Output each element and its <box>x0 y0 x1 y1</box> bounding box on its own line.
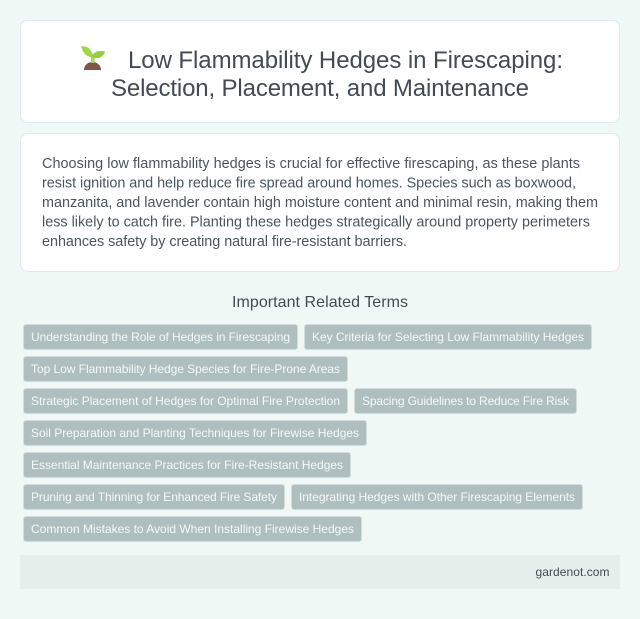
tag: Common Mistakes to Avoid When Installing Firewise Hedges <box>31 522 354 536</box>
tag: Essential Maintenance Practices for Fire-Resistant Hedges <box>31 458 343 472</box>
tag: Integrating Hedges with Other Firescaping Elements <box>299 490 575 504</box>
footer: source: gardenot.com <box>536 565 610 579</box>
text block: introduction: enhances safety by creating natural fire-resistant barriers. <box>42 234 407 250</box>
icon: seedling <box>81 46 105 70</box>
tag <box>24 356 348 382</box>
text block: introduction: Choosing low flammability hedges is crucial for effective firescaping, as these plants <box>42 156 580 172</box>
heading: title: Selection, Placement, and Maintenance <box>111 75 529 102</box>
tag <box>24 324 298 350</box>
text block: introduction: manzanita, and lavender contain high moisture content and minimal resin, making them <box>42 195 598 211</box>
tag: Top Low Flammability Hedge Species for Fire-Prone Areas <box>31 362 340 376</box>
text block: introduction <box>42 156 598 250</box>
tag <box>292 484 582 510</box>
tag <box>24 484 284 510</box>
tag <box>304 324 592 350</box>
tag <box>24 452 350 478</box>
heading: important related terms: Important Related Terms <box>232 294 408 311</box>
tag: Spacing Guidelines to Reduce Fire Risk <box>362 394 570 408</box>
heading: title: Low Flammability Hedges in Firescaping: <box>128 47 563 74</box>
footer bar <box>20 555 620 589</box>
tag <box>354 388 576 414</box>
heading: title <box>111 47 563 102</box>
text block: introduction: resist ignition and help reduce fire spread around homes. Species such as boxwood, <box>42 176 576 192</box>
tag: Understanding the Role of Hedges in Firescaping <box>31 330 290 344</box>
tag <box>24 388 348 414</box>
panel: title card <box>20 20 620 122</box>
text block: introduction: less likely to catch fire. Planting these hedges strategically around property perimeters <box>42 214 590 230</box>
tag: Key Criteria for Selecting Low Flammability Hedges <box>312 330 584 344</box>
tag: Strategic Placement of Hedges for Optimal Fire Protection <box>31 394 340 408</box>
list: related term tags <box>24 324 592 542</box>
tag <box>24 516 362 542</box>
tag: Pruning and Thinning for Enhanced Fire Safety <box>31 490 277 504</box>
tag <box>24 420 366 446</box>
tag: Soil Preparation and Planting Techniques for Firewise Hedges <box>31 426 359 440</box>
panel: introduction <box>20 134 620 272</box>
